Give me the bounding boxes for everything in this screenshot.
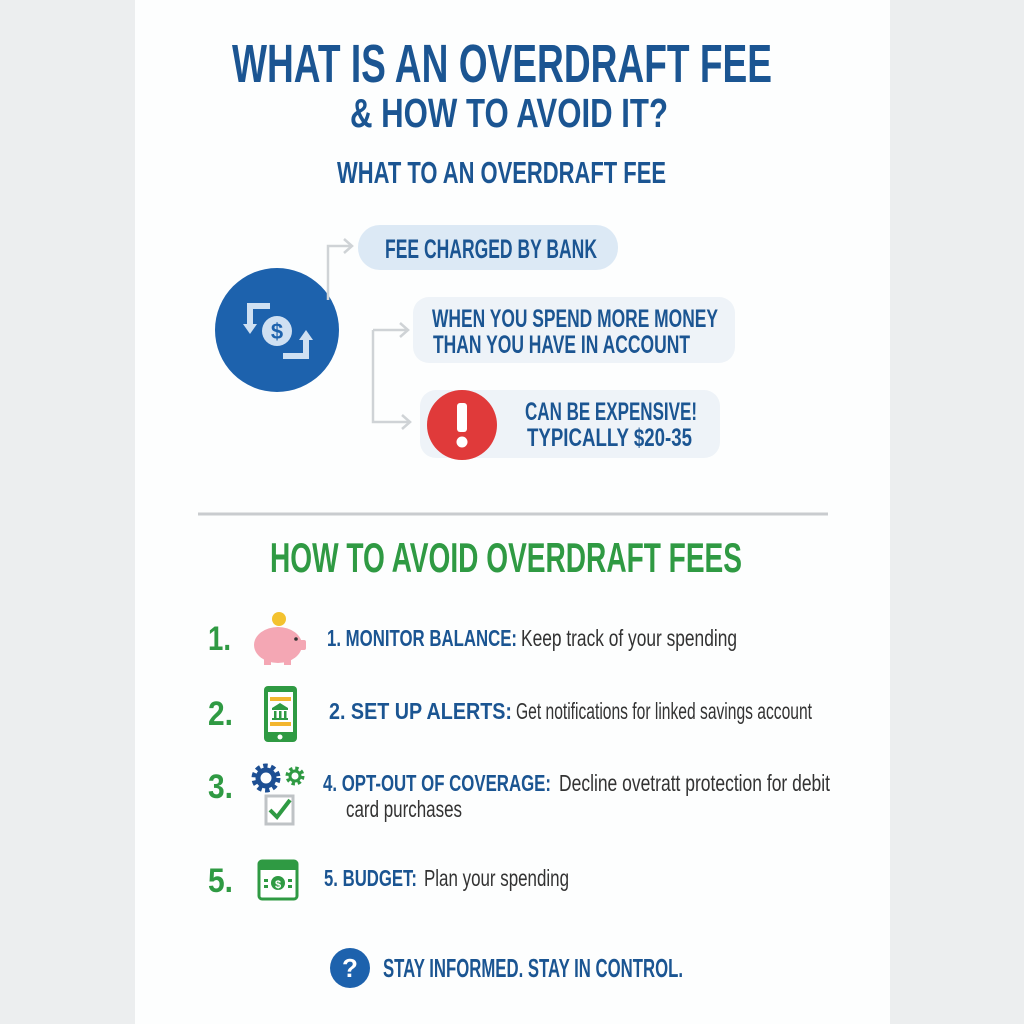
subheading: WHAT TO AN OVERDRAFT FEE [337,155,666,190]
list item 3: 3. [208,768,233,806]
list item 2: 2. SET UP ALERTS: [329,698,512,724]
icon: red exclamation [427,390,497,460]
icon: blue money circle: $ [271,319,283,344]
footer: STAY INFORMED. STAY IN CONTROL. [383,953,683,983]
panel: main card [135,0,890,1024]
icon: question: ? [342,953,358,983]
list item 3: Decline ovetratt protection for debit [559,770,830,796]
list item 1: 1. MONITOR BALANCE: [327,625,517,651]
title [232,34,772,136]
arrows: connectors [328,239,410,429]
callout: spend more than you have: WHEN YOU SPEND MORE MONEY [432,305,718,333]
icon: gears and checkbox [255,767,302,824]
icon: blue money circle [215,268,339,392]
list item 2 [208,686,812,742]
list item 3: 4. OPT-OUT OF COVERAGE: [323,770,551,796]
list item 1: Keep track of your spending [521,625,737,651]
callout: fee charged by bank [358,225,618,270]
icon: budget calendar: $ [275,879,281,891]
list item 5: Plan your spending [424,865,569,891]
list item 1: 1. [208,620,231,658]
icon: budget calendar [259,861,297,899]
title: WHAT IS AN OVERDRAFT FEE [232,34,772,94]
callout: spend more than you have [413,297,735,363]
list item 3: card purchases [346,796,462,822]
icon: phone bank [264,686,297,742]
callout: fee charged by bank: FEE CHARGED BY BANK [385,234,597,264]
list item 5: 5. BUDGET: [324,865,417,891]
callout: spend more than you have: THAN YOU HAVE IN ACCOUNT [433,331,690,359]
heading: how to avoid: HOW TO AVOID OVERDRAFT FEES [270,534,742,581]
list item 5: 5. [208,862,233,900]
footer [330,948,683,988]
callout: can be expensive: CAN BE EXPENSIVE! [525,398,697,426]
icon: piggy bank [254,612,306,665]
callout: can be expensive: TYPICALLY $20-35 [527,424,692,452]
title: & HOW TO AVOID IT? [350,90,668,136]
icon: question [330,948,370,988]
list item 5 [208,861,569,900]
list item 3 [208,767,830,824]
list item 2: Get notifications for linked savings account [516,698,812,724]
list item 2: 2. [208,695,233,733]
list item 1 [208,612,737,665]
callout: can be expensive [420,390,720,460]
